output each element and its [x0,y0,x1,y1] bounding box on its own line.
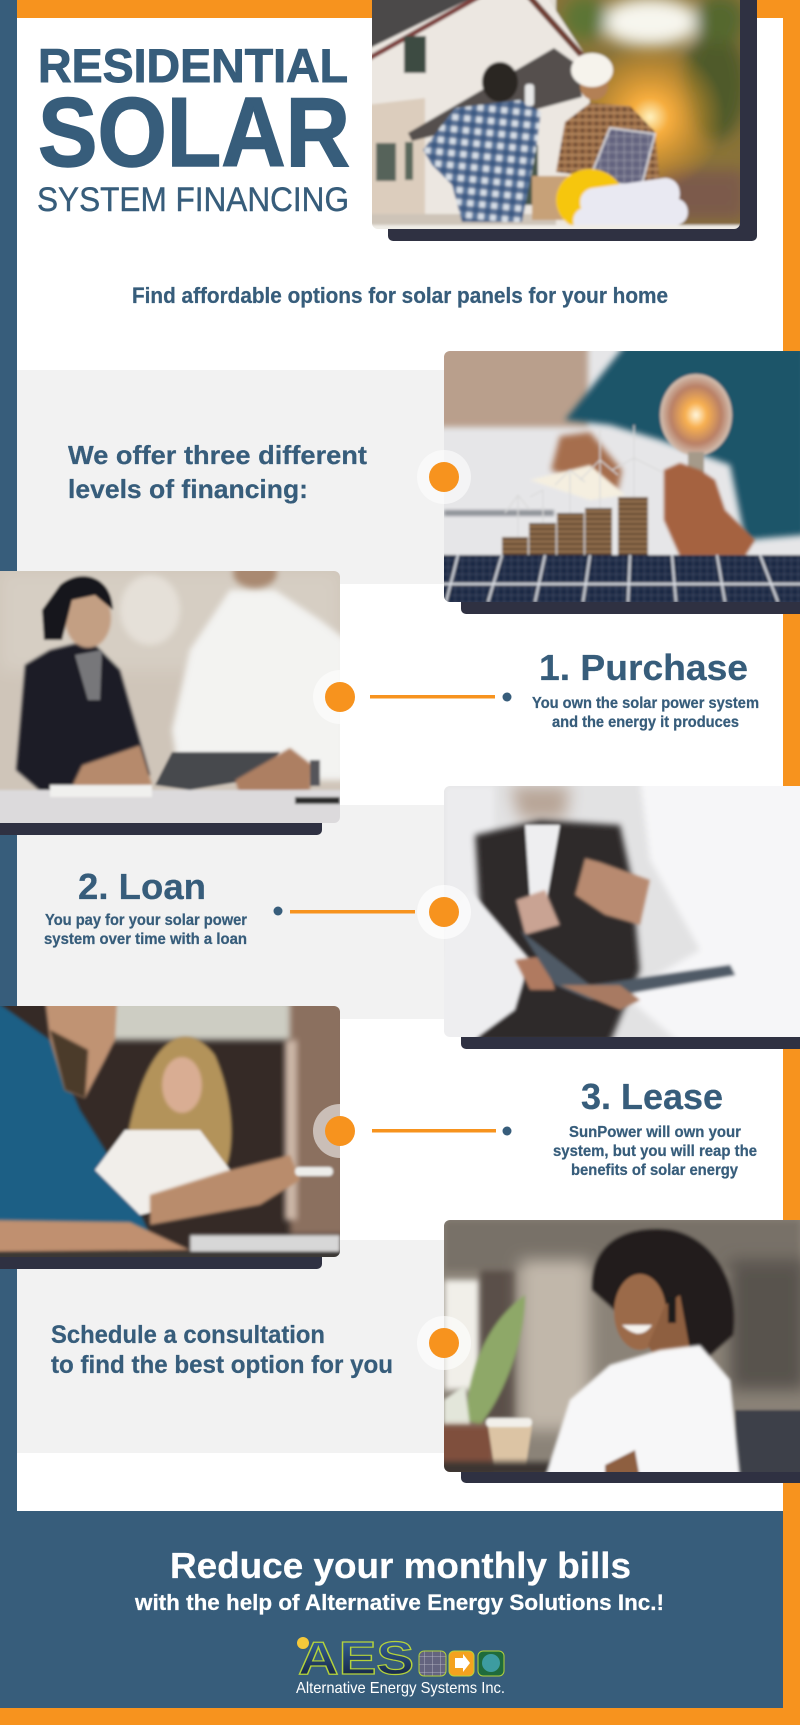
photo frame: lease [0,1240,322,1269]
text: option 3 lease [553,1076,757,1179]
footer subheadline: with the help of Alternative Energy Solutions Inc.! [134,1590,664,1615]
text: option 1 purchase: You own the solar power system [532,695,759,712]
title: SYSTEM FINANCING [37,181,349,219]
subtitle: Find affordable options for solar panels for your home [132,283,668,308]
photo frame: purchase [0,800,322,835]
left blue edge bar [0,0,17,1725]
text: option 3 lease: 3. Lease [581,1076,723,1117]
photo: homeowner and engineer with solar panel [366,0,747,236]
panel: footer call to action [0,1511,783,1708]
text: three levels of financing: levels of financing: [68,474,308,504]
title: SOLAR [38,77,350,187]
photo frame: header [388,0,757,241]
text: option 3 lease: system, but you will reap the [553,1143,757,1160]
photo frame: consultation [461,1430,800,1483]
text: schedule a consultation [51,1321,393,1379]
text: option 3 lease: benefits of solar energy [571,1162,738,1179]
footer headline: Reduce your monthly bills [170,1545,631,1586]
text: schedule a consultation: Schedule a consultation [51,1321,325,1349]
photo: couple reviewing documents [0,1000,346,1263]
panel: financing intro background [17,370,444,584]
connector: lease node and line [313,1104,512,1158]
photo frame: coins [461,560,800,614]
text: option 1 purchase: 1. Purchase [539,647,748,688]
text: option 3 lease: SunPower will own your [569,1124,741,1141]
photo: business people exchanging pen [438,780,800,1043]
photo: woman on the phone [438,1214,800,1478]
logo: Alternative Energy Systems: AES [298,1632,414,1684]
text: three levels of financing [68,440,367,504]
photo: woman and man reviewing tablet [0,558,346,830]
connector: consultation node [417,1316,471,1370]
photo: light bulb, coins and solar panels [438,345,800,607]
logo: Alternative Energy Systems: Alternative Energy Systems Inc. [296,1680,505,1697]
top orange bar [17,0,800,18]
text: three levels of financing: We offer three different [68,440,367,470]
panel: loan background [17,805,444,1019]
connector: financing node [417,450,471,504]
text: option 1 purchase [532,647,759,731]
text: option 2 loan: 2. Loan [78,866,206,907]
panel: consultation background [17,1240,444,1453]
text: option 1 purchase: and the energy it produces [552,714,739,731]
bottom orange bar [0,1708,800,1725]
text: option 2 loan [44,866,247,948]
logo: Alternative Energy Systems [296,1632,505,1697]
photo frame: loan [461,1000,800,1049]
text: option 2 loan: You pay for your solar power [45,912,247,929]
text: option 2 loan: system over time with a loan [44,931,247,948]
connector: loan node and line [274,885,471,939]
title: RESIDENTIAL [38,39,348,92]
text: schedule a consultation: to find the best option for you [51,1351,393,1379]
title [37,39,350,219]
connector: purchase node and line [313,670,512,724]
right orange edge bar [783,0,800,1725]
